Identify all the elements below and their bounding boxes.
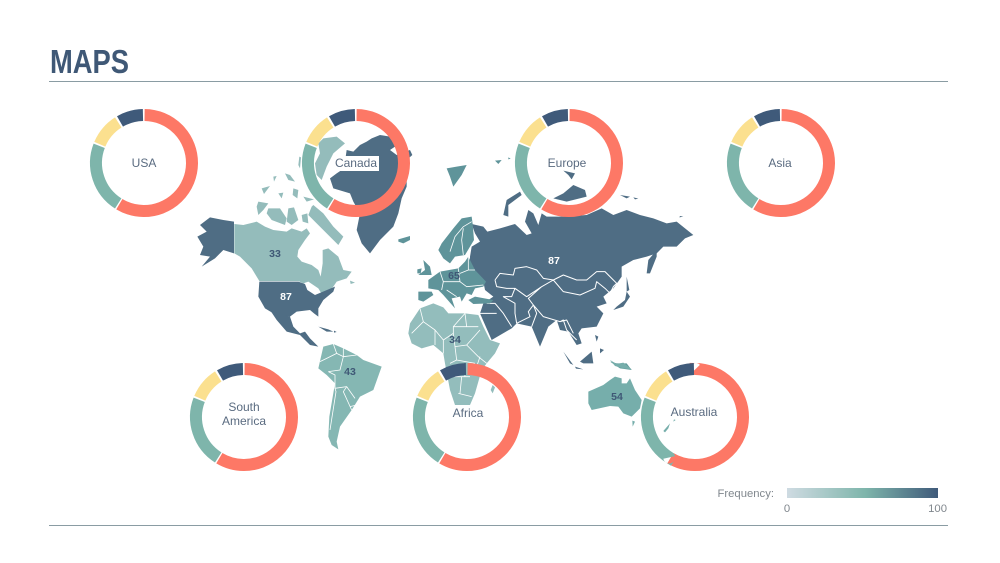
donut: South America <box>178 351 310 483</box>
donut: Africa <box>401 351 533 483</box>
map labels: 33 <box>269 248 281 260</box>
region: Australia and New Zealand <box>588 360 676 432</box>
legend: frequency: 100 <box>928 503 947 515</box>
region: Alaska, USA and Mexico <box>197 217 337 347</box>
donut: Australia: Australia <box>671 405 718 419</box>
region borders: South America <box>320 344 357 430</box>
region: New Guinea <box>610 362 632 370</box>
donut: Canada: Canada <box>335 156 377 170</box>
region borders: Asia <box>480 267 617 340</box>
world map <box>197 135 693 449</box>
donut: USA: USA <box>132 156 156 170</box>
map labels: 34 <box>449 334 461 346</box>
donut: Asia <box>715 97 847 229</box>
donut: Australia <box>629 351 761 483</box>
region: Iceland <box>398 236 410 243</box>
region borders: Africa <box>412 308 487 397</box>
donut: South America: South <box>228 400 260 414</box>
map labels: 87 <box>548 255 560 267</box>
map labels: 43 <box>344 366 356 378</box>
map labels: 65 <box>448 270 460 282</box>
map labels <box>269 248 623 403</box>
map labels: 54 <box>611 391 623 403</box>
donut: South America: America <box>222 414 266 428</box>
region: Greenland <box>330 135 412 253</box>
title: MAPS <box>50 43 129 80</box>
Eurasia <box>417 157 693 370</box>
donut: Europe: Europe <box>548 156 587 170</box>
legend: frequency: Frequency: <box>717 488 774 500</box>
donut: Europe <box>503 97 635 229</box>
map labels: 87 <box>280 291 292 303</box>
legend: frequency: 0 <box>784 503 790 515</box>
region: Europe <box>417 157 511 308</box>
North America <box>197 135 412 347</box>
region: Canada <box>234 137 355 297</box>
region: Russia and Asia <box>470 171 693 369</box>
region: South America <box>318 344 382 449</box>
donut: Canada <box>290 97 422 229</box>
legend: frequency <box>717 488 947 515</box>
donut: Africa: Africa <box>453 406 484 420</box>
region: Africa <box>408 303 500 405</box>
donut: USA <box>78 97 210 229</box>
donut: Asia: Asia <box>768 156 792 170</box>
